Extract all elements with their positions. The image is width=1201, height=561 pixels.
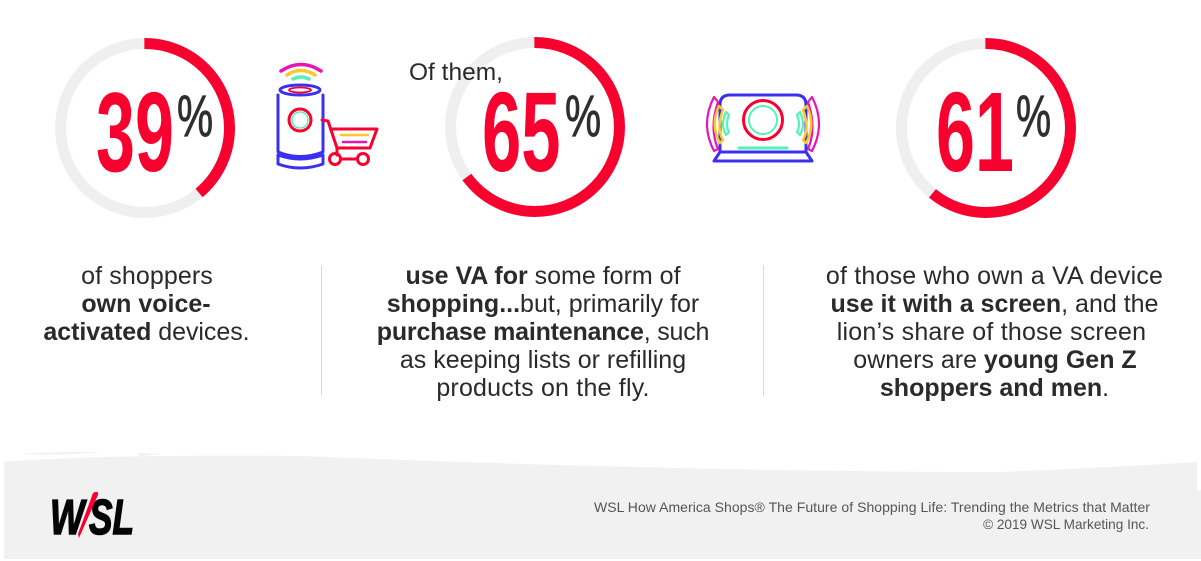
logo: WSL: W — [50, 491, 87, 545]
text block: of shoppers: own voice- — [81, 290, 211, 318]
text block: of shoppers: activated devices. — [43, 318, 250, 346]
text block: use with a screen: of those who own a VA device — [826, 262, 1163, 290]
text block: use VA for shopping: as keeping lists or refilling — [400, 346, 686, 374]
number: 61%: 61 — [936, 69, 1014, 195]
panel: 39 percent stat — [60, 44, 230, 212]
donut chart: 39% — [60, 44, 230, 212]
text block: of shoppers: of shoppers — [81, 262, 213, 290]
text block: use VA for shopping: products on the fly. — [436, 374, 650, 402]
donut chart: 61% — [902, 44, 1070, 212]
donut chart: 65% — [450, 42, 620, 212]
footer source text: © 2019 WSL Marketing Inc. — [983, 517, 1149, 532]
text block: use VA for shopping: shopping...but, primarily for — [387, 290, 699, 318]
footer band — [4, 456, 1201, 559]
number: 61% — [936, 69, 1051, 195]
logo: WSL — [50, 490, 134, 545]
number: 65%: % — [565, 84, 601, 149]
number: 39% — [96, 69, 213, 195]
panel: 61 percent stat — [902, 44, 1070, 212]
footer source text: WSL How America Shops® The Future of Shopping Life: Trending the Metrics that Matter — [594, 499, 1150, 515]
text block: use VA for shopping: use VA for some form of — [405, 262, 681, 290]
number: 39%: 39 — [96, 69, 174, 195]
number: 61%: % — [1016, 83, 1051, 149]
text block: of shoppers — [43, 262, 250, 346]
text: of them: Of them, — [409, 59, 503, 86]
number: 65%: 65 — [482, 69, 561, 195]
icon: smart speaker with shopping cart — [278, 64, 377, 168]
text block: use with a screen: lion’s share of those screen — [837, 318, 1146, 346]
text block: use VA for shopping: purchase maintenance, such — [377, 318, 709, 346]
text block: use VA for shopping — [377, 262, 709, 402]
text block: use with a screen: use it with a screen, and the — [831, 290, 1158, 318]
text block: use with a screen — [826, 262, 1163, 402]
text block: use with a screen: shoppers and men. — [880, 374, 1109, 402]
panel: 65 percent stat — [409, 42, 620, 212]
text block: use with a screen: owners are young Gen Z — [853, 346, 1137, 374]
number: 39%: % — [177, 84, 213, 149]
icon: voice assistant with screen — [707, 95, 819, 161]
footer source text — [594, 499, 1150, 532]
logo: WSL: SL — [89, 490, 134, 545]
number: 65% — [482, 69, 601, 195]
